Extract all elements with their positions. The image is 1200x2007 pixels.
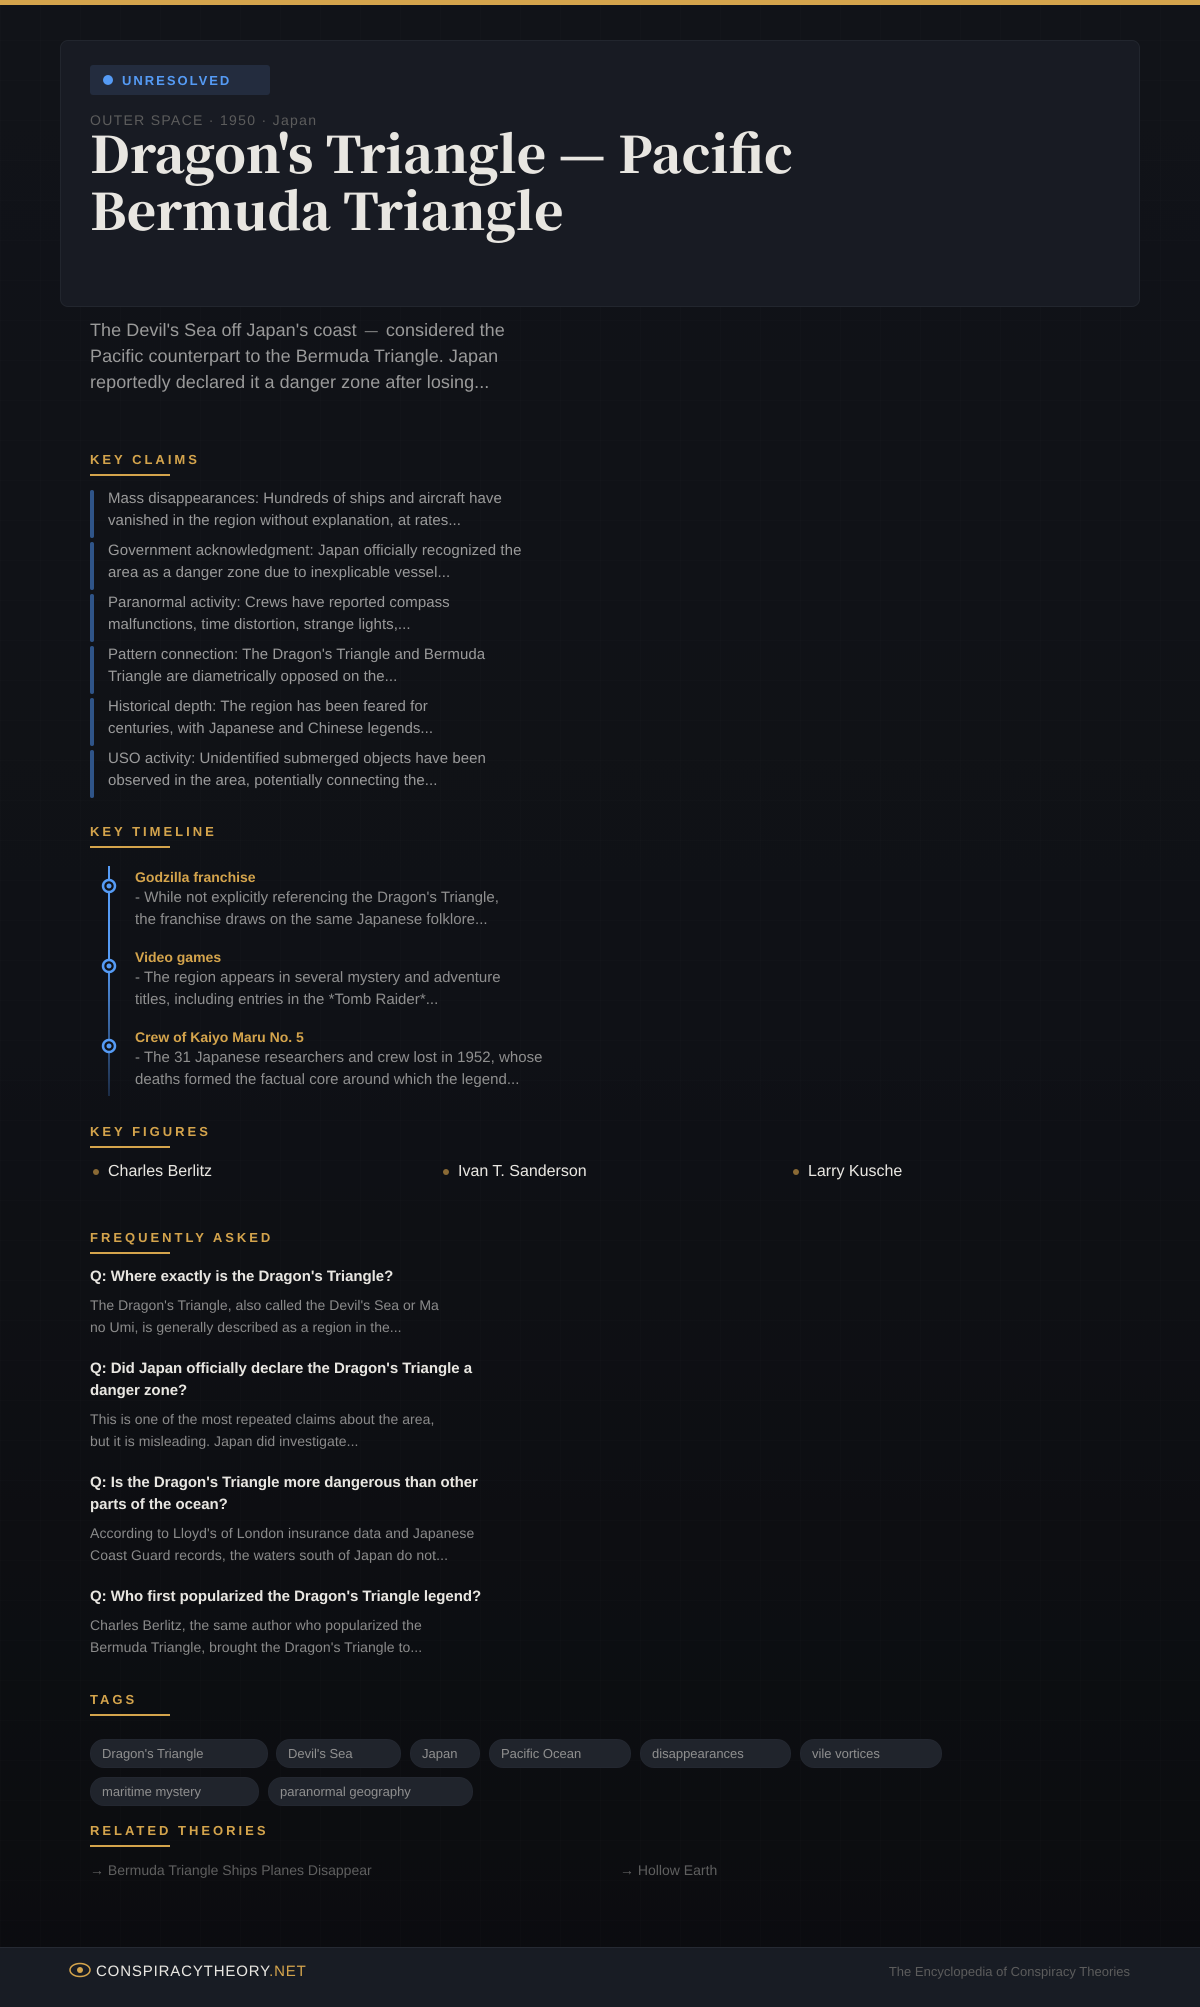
claim 3: Paranormal activity: Crews have reported compass [108,594,450,611]
claim 3: malfunctions, time distortion, strange lights,... [108,616,411,633]
FAQ 1: no Umi, is generally described as a region in the... [90,1319,402,1335]
timeline event 2: titles, including entries in the *Tomb Raider*... [135,991,438,1008]
tag: Pacific Ocean [501,1746,581,1761]
heading: key figures: KEY FIGURES [90,1124,211,1139]
FAQ 2: This is one of the most repeated claims about the area, [90,1411,434,1427]
tag group [90,1739,942,1806]
timeline event 2 [135,949,501,1008]
timeline event 3 [135,1029,543,1088]
tag [489,1739,631,1768]
tag: Japan [422,1746,457,1761]
intro text: Pacific counterpart to the Bermuda Triangle. Japan [90,346,498,366]
figure: Charles Berlitz: Charles Berlitz [108,1163,212,1180]
figure: Larry Kusche: Larry Kusche [808,1163,902,1180]
claim 3 [90,594,450,642]
timeline event 2: - The region appears in several mystery and adventure [135,969,501,986]
tag: Devil's Sea [288,1746,353,1761]
tag [800,1739,942,1768]
tag [268,1777,473,1806]
timeline event 1 [135,869,499,928]
tag [640,1739,791,1768]
FAQ 4 [90,1588,481,1655]
footer [0,1947,1200,2007]
icon: status dot [103,75,113,85]
tag [276,1739,401,1768]
FAQ 1: The Dragon's Triangle, also called the Devil's Sea or Ma [90,1297,439,1313]
tag [90,1739,268,1768]
claim 4: Triangle are diametrically opposed on the... [108,668,397,685]
FAQ 3: Q: Is the Dragon's Triangle more dangerous than other [90,1474,478,1491]
FAQ 2: danger zone? [90,1382,187,1399]
figure: Ivan T. Sanderson: Ivan T. Sanderson [458,1163,587,1180]
timeline event 1: Godzilla franchise [135,869,256,885]
brand name: CONSPIRACYTHEORY.NET [96,1963,307,1980]
title [90,116,793,244]
top accent bar [0,0,1200,5]
claim 6: USO activity: Unidentified submerged objects have been [108,750,486,767]
timeline event 3: Crew of Kaiyo Maru No. 5 [135,1029,304,1045]
claim 5 [90,698,433,746]
tag [410,1739,480,1768]
FAQ 4: Q: Who first popularized the Dragon's Triangle legend? [90,1588,481,1605]
icon: eye logo [69,1962,91,1978]
claim 1 [90,490,502,538]
timeline event 3: - The 31 Japanese researchers and crew lost in 1952, whose [135,1049,543,1066]
badge label: UNRESOLVED [122,73,231,88]
heading: related theories: RELATED THEORIES [90,1823,268,1838]
timeline event 2: Video games [135,949,221,965]
intro text: reportedly declared it a danger zone after losing... [90,372,489,392]
claim 5: Historical depth: The region has been feared for [108,698,428,715]
heading: tags: TAGS [90,1692,137,1707]
FAQ 3: parts of the ocean? [90,1496,228,1513]
footer tagline: The Encyclopedia of Conspiracy Theories [889,1964,1130,1979]
panel: key claims list [90,490,522,798]
heading: key claims: KEY CLAIMS [90,452,200,467]
FAQ 1 [90,1268,439,1335]
FAQ 3: According to Lloyd's of London insurance data and Japanese [90,1525,474,1541]
chart: timeline [102,866,116,1096]
title: Dragon's Triangle — Pacific [90,116,793,188]
title: Bermuda Triangle [90,172,563,244]
claim 6 [90,750,486,798]
FAQ 4: Charles Berlitz, the same author who popularized the [90,1617,422,1633]
timeline event 3: deaths formed the factual core around which the legend... [135,1071,519,1088]
tag: vile vortices [812,1746,880,1761]
claim 4: Pattern connection: The Dragon's Triangle and Bermuda [108,646,485,663]
FAQ 2 [90,1360,472,1449]
claim 5: centuries, with Japanese and Chinese legends... [108,720,433,737]
heading: frequently asked: FREQUENTLY ASKED [90,1230,273,1245]
intro text: The Devil's Sea off Japan's coast — considered the [90,320,505,340]
tag: paranormal geography [280,1784,411,1799]
timeline event 1: the franchise draws on the same Japanese folklore... [135,911,488,928]
claim 2: Government acknowledgment: Japan officially recognized the [108,542,522,559]
claim 2: area as a danger zone due to inexplicable vessel... [108,564,450,581]
claim 2 [90,542,522,590]
claim 1: Mass disappearances: Hundreds of ships and aircraft have [108,490,502,507]
FAQ 2: Q: Did Japan officially declare the Dragon's Triangle a [90,1360,472,1377]
claim 6: observed in the area, potentially connecting the... [108,772,437,789]
FAQ 2: but it is misleading. Japan did investigate... [90,1433,358,1449]
FAQ 3 [90,1474,478,1563]
FAQ 4: Bermuda Triangle, brought the Dragon's Triangle to... [90,1639,422,1655]
tag: disappearances [652,1746,744,1761]
meta line: OUTER SPACE · 1950 · Japan [90,112,317,128]
heading: key timeline: KEY TIMELINE [90,824,217,839]
FAQ 1: Q: Where exactly is the Dragon's Triangle? [90,1268,393,1285]
FAQ 3: Coast Guard records, the waters south of Japan do not... [90,1547,448,1563]
tag: maritime mystery [102,1784,201,1799]
claim 4 [90,646,486,694]
tag [90,1777,259,1806]
intro text [90,320,505,392]
tag: Dragon's Triangle [102,1746,203,1761]
status badge [90,65,270,95]
related link: Hollow Earth: → Hollow Earth [620,1862,717,1878]
related link: Bermuda Triangle: → Bermuda Triangle Ships Planes Disappear [90,1862,372,1878]
panel: hero header [60,40,1140,307]
claim 1: vanished in the region without explanation, at rates... [108,512,461,529]
timeline event 1: - While not explicitly referencing the Dragon's Triangle, [135,889,499,906]
timeline axis and nodes [102,866,116,1096]
